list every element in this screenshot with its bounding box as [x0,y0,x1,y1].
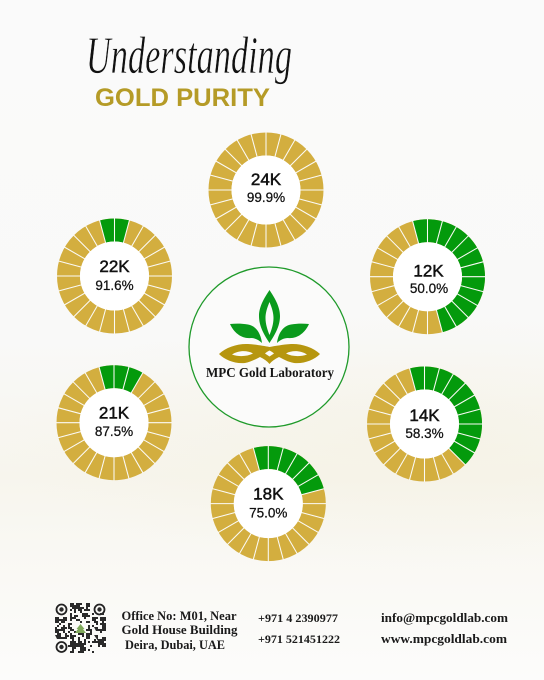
ring: 18K 75.0%: 18K [253,484,284,503]
ring: 12K 50.0%: 12K [413,262,444,281]
QR extra modules [57,605,104,653]
ring: 14K 58.3%: 14K [409,406,440,425]
email and website: www.mpcgoldlab.com [381,631,507,646]
ring: 21K 87.5% [56,365,172,481]
ring: 21K 87.5%: 21K [99,403,130,422]
ring: 14K 58.3%: 58.3% [405,426,444,441]
phone numbers: +971 521451222 [258,632,340,646]
ring: 12K 50.0%: 50.0% [410,281,448,296]
ring: 18K 75.0% [210,446,326,562]
heading: gold purity: GOLD PURITY [95,85,271,112]
icon: left leaf [230,324,262,343]
ring: 22K 91.6% [56,218,172,334]
ring: 18K 75.0%: 75.0% [249,505,287,520]
ring: 24K 99.9%: 99.9% [247,190,285,205]
QR code [55,603,106,653]
phone numbers: +971 4 2390977 [258,611,338,625]
icon: gold wings [219,344,320,364]
phone numbers [258,611,340,646]
icon: center leaf [259,290,280,343]
email and website [381,610,508,646]
ring: 12K 50.0% [370,219,486,335]
ring: 21K 87.5%: 87.5% [95,424,133,439]
ring: 22K 91.6%: 91.6% [95,278,134,293]
address: Deira, Dubai, UAE [125,637,225,652]
address: Gold House Building [122,622,238,637]
email and website: info@mpcgoldlab.com [381,610,508,625]
title: Understanding: Understanding [86,26,292,85]
icon: right leaf [277,324,309,343]
ring: 24K 99.9%: 24K [251,170,282,189]
address: Office No: M01, Near [122,608,237,623]
ring: 24K 99.9% [208,132,324,248]
icon: qr center mark [75,624,86,633]
address [122,608,238,652]
center logo badge [189,267,349,427]
ring: 22K 91.6%: 22K [99,257,130,276]
ring: 14K 58.3% [366,366,482,482]
logo name: MPC Gold Laboratory [206,365,334,380]
